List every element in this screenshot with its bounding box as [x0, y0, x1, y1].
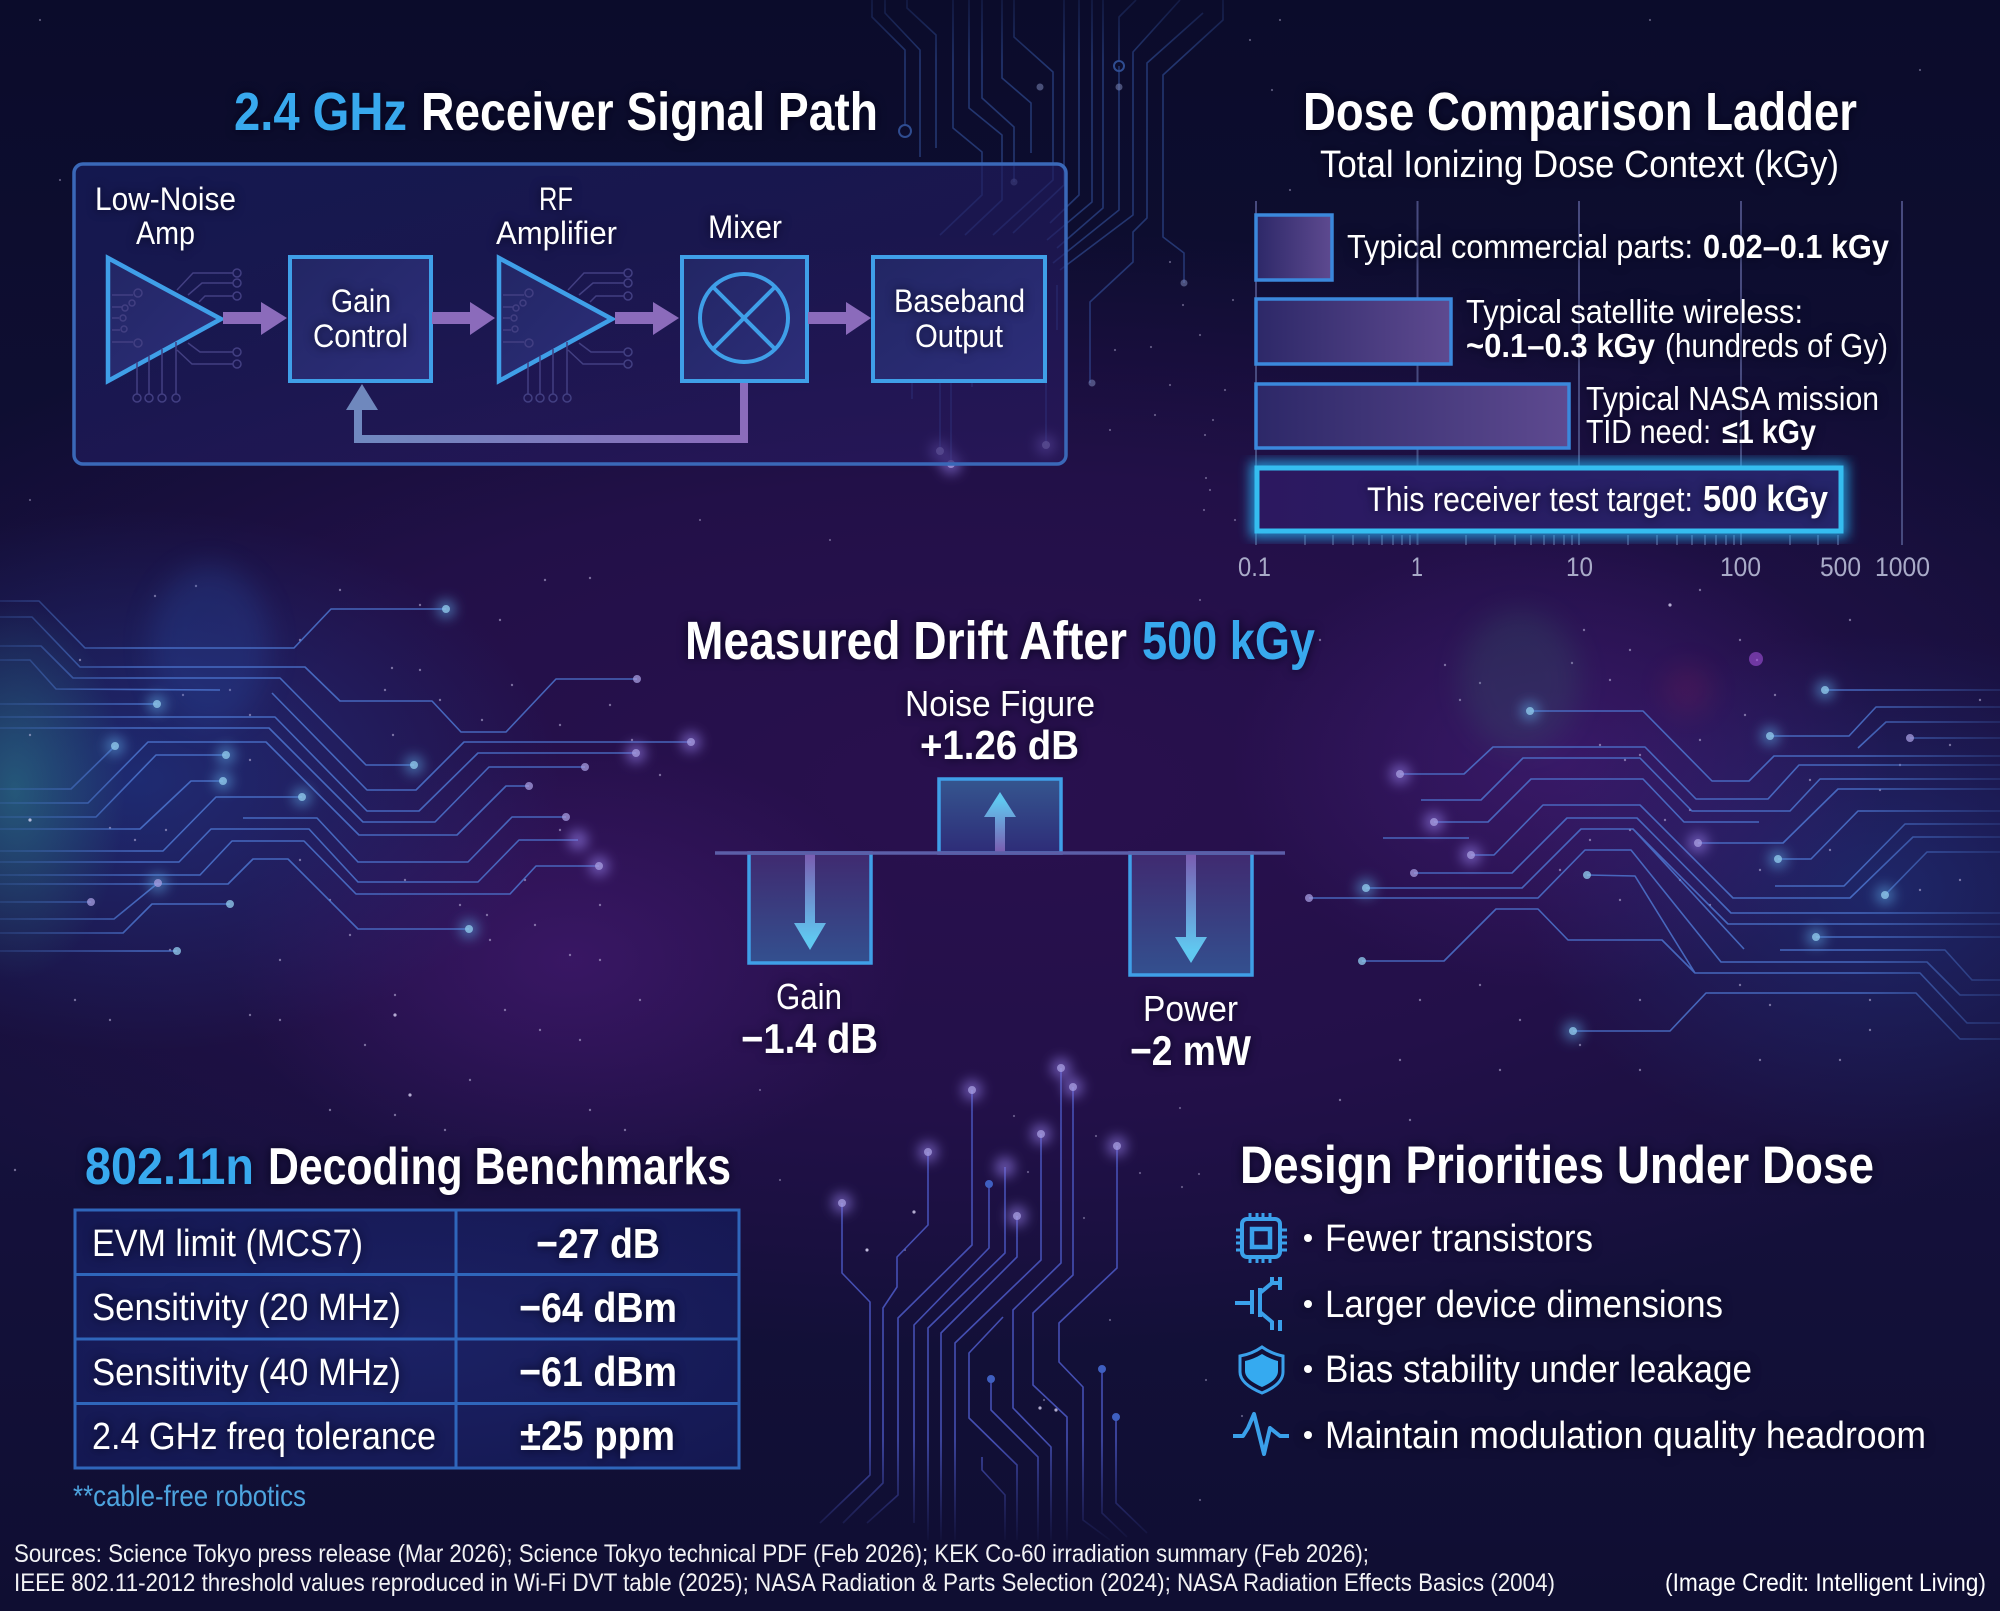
arrow: amp to gain control — [223, 302, 287, 335]
footnote: **cable-free robotics — [73, 1480, 306, 1513]
title: decoding benchmarks: 802.11n — [85, 1138, 254, 1196]
label: rf amplifier — [496, 181, 617, 251]
sources — [14, 1540, 1555, 1597]
label: NASA mission: Typical NASA mission — [1586, 380, 1879, 417]
label: gain: −1.4 dB — [741, 1015, 878, 1062]
label: NASA mission — [1586, 380, 1879, 450]
axis labels: 100 — [1720, 552, 1761, 582]
label: noise figure: +1.26 dB — [920, 722, 1079, 768]
title: design priorities: Design Priorities Under Dose — [1240, 1136, 1874, 1195]
icon: chip — [1236, 1213, 1287, 1263]
axis labels: 1 — [1411, 552, 1423, 582]
row: frequency tolerance — [92, 1412, 675, 1459]
box: gain control: Gain — [331, 283, 391, 319]
label: commercial parts: Typical commercial parts: — [1347, 228, 1693, 265]
label: mixer: Mixer — [708, 209, 782, 245]
icon: pulse — [1233, 1414, 1289, 1454]
label: satellite wireless: Typical satellite wireless: — [1466, 293, 1803, 330]
item: bias stability: Bias stability under leakage — [1325, 1349, 1752, 1391]
label: power — [1130, 988, 1251, 1074]
label: NASA mission: TID need: — [1586, 413, 1711, 450]
bar: gain — [749, 853, 871, 963]
label: rf amplifier: RF — [539, 181, 573, 217]
stage: low-noise amp — [108, 258, 241, 402]
label: noise figure — [905, 683, 1095, 768]
title: measured drift: 500 kGy — [1142, 611, 1315, 671]
subtitle: Total Ionizing Dose Context (kGy) — [1320, 144, 1839, 186]
label: gain — [741, 976, 878, 1062]
list: design priorities — [1233, 1213, 1926, 1457]
label: receiver test target: 500 kGy — [1703, 478, 1828, 519]
axis labels: 500 — [1820, 552, 1861, 582]
baseline — [715, 851, 1285, 855]
box: gain control — [290, 257, 431, 381]
title: dose comparison ladder — [1303, 82, 1857, 186]
arrow: mixer to baseband — [808, 302, 871, 335]
bar: receiver test target — [1257, 468, 1841, 531]
item: modulation headroom: Maintain modulation quality headroom — [1325, 1415, 1926, 1457]
box: baseband output — [873, 257, 1045, 381]
axis labels: 0.1 — [1238, 552, 1271, 582]
row: EVM limit: −27 dB — [536, 1220, 660, 1267]
row: sensitivity 20 MHz: −64 dBm — [519, 1284, 677, 1331]
label: satellite wireless — [1466, 293, 1888, 364]
bar: NASA mission — [1256, 384, 1569, 448]
axis labels — [1238, 552, 1930, 582]
bar: commercial parts — [1256, 215, 1332, 280]
icon: transistor — [1235, 1277, 1280, 1331]
title: decoding benchmarks: Decoding Benchmarks — [268, 1138, 731, 1196]
row: sensitivity 20 MHz: Sensitivity (20 MHz) — [92, 1287, 401, 1329]
chart: dose ladder — [1238, 201, 1930, 582]
stage: rf amplifier — [499, 258, 632, 402]
arrow: rf amplifier to mixer — [615, 302, 679, 335]
label: low-noise amp: Low-Noise — [95, 181, 236, 217]
title: dose comparison ladder: Dose Comparison Ladder — [1303, 82, 1857, 142]
table: benchmarks — [75, 1210, 739, 1468]
label: power: Power — [1143, 988, 1238, 1029]
row: sensitivity 40 MHz — [92, 1348, 677, 1395]
box: gain control: Control — [313, 318, 408, 354]
icon: shield — [1240, 1347, 1283, 1393]
item: fewer transistors: Fewer transistors — [1325, 1218, 1593, 1260]
axis labels: 1000 — [1875, 552, 1930, 582]
label: NASA mission: ≤1 kGy — [1722, 413, 1817, 450]
bar: satellite wireless — [1256, 299, 1451, 364]
row: frequency tolerance: ±25 ppm — [520, 1412, 675, 1459]
row: EVM limit: EVM limit (MCS7) — [92, 1223, 363, 1265]
title: receiver signal path: 2.4 GHz — [234, 82, 407, 142]
row: sensitivity 40 MHz: −61 dBm — [519, 1348, 677, 1395]
label: commercial parts — [1347, 228, 1890, 265]
bar: power — [1130, 853, 1252, 975]
arrow: gain control to rf amplifier — [432, 302, 495, 335]
row: sensitivity 20 MHz — [92, 1284, 677, 1331]
label: rf amplifier: Amplifier — [496, 215, 617, 251]
label: noise figure: Noise Figure — [905, 683, 1095, 724]
arrow: feedback loop — [346, 383, 744, 439]
label: satellite wireless: ~0.1–0.3 kGy — [1466, 327, 1656, 364]
axis labels: 10 — [1566, 552, 1593, 582]
label: low-noise amp — [95, 181, 236, 251]
sources: Sources: Science Tokyo press release (Mar 2026); Science Tokyo technical PDF (Feb 2026); KEK Co-60 irradiation summary (Feb 2026); — [14, 1540, 1369, 1568]
sources: IEEE 802.11-2012 threshold values reproduced in Wi-Fi DVT table (2025); NASA Radiation & Parts Selection (2024); NASA Radiation Effects Basics (2004) — [14, 1569, 1555, 1597]
label: power: −2 mW — [1130, 1027, 1251, 1074]
title: measured drift: Measured Drift After — [685, 611, 1127, 671]
item: larger device dimensions: Larger device dimensions — [1325, 1284, 1723, 1326]
bar: noise figure — [939, 779, 1061, 853]
box: baseband output: Output — [915, 318, 1003, 354]
box: mixer — [682, 257, 807, 381]
label: receiver test target: This receiver test target: — [1367, 481, 1693, 519]
row: frequency tolerance: 2.4 GHz freq tolerance — [92, 1416, 436, 1458]
title: receiver signal path: Receiver Signal Path — [421, 82, 878, 142]
box: baseband output: Baseband — [894, 283, 1025, 319]
title: receiver signal path — [234, 82, 878, 142]
row: EVM limit — [92, 1220, 660, 1267]
label: low-noise amp: Amp — [136, 215, 195, 251]
label: commercial parts: 0.02–0.1 kGy — [1703, 228, 1890, 265]
label: satellite wireless: (hundreds of Gy) — [1665, 327, 1888, 364]
chart: measured drift — [715, 683, 1285, 1074]
row: sensitivity 40 MHz: Sensitivity (40 MHz) — [92, 1352, 401, 1394]
title: decoding benchmarks — [85, 1138, 731, 1196]
label: gain: Gain — [776, 976, 842, 1017]
panel: signal path diagram — [74, 164, 1066, 464]
